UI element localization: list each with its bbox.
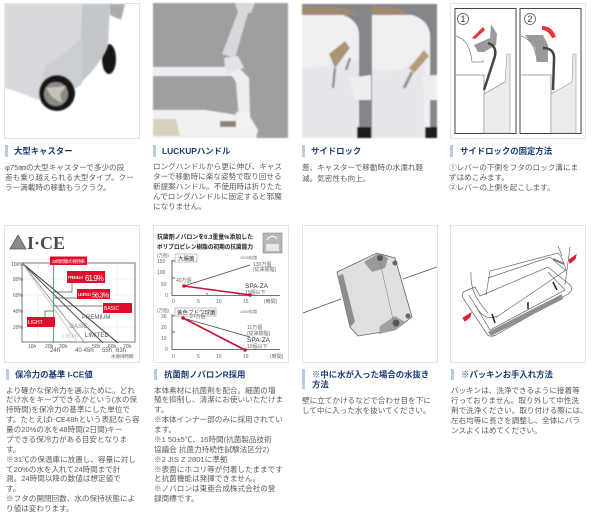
text: I-CE: だけ水をキープできるかという(水の保 <box>6 394 137 404</box>
chart title: 抗菌剤ノバロンを0.3重量%添加した <box>157 233 253 241</box>
text: I-CE: す。 <box>6 484 20 493</box>
chart: antibacterial performance: 50 <box>161 282 167 288</box>
red labels: LIGHT <box>28 320 43 326</box>
logo: I-CE: I·CE <box>27 233 65 253</box>
text: fixing method: ①レバーの下側をフタのロック溝にま <box>449 162 578 172</box>
chart title: ポリプロピレン樹脂の初期の抗菌能力 <box>157 243 253 251</box>
panel: I-CE value <box>4 226 140 513</box>
text: antibacterial: 本体素材に抗菌剤を配合。細菌の増 <box>154 385 276 395</box>
chart: antibacterial performance: 0 <box>165 347 168 353</box>
heading: packing care: ※パッキンお手入れ方法 <box>461 370 553 380</box>
axis and series labels: 60% <box>13 293 24 299</box>
photo: caster wheels <box>4 4 140 138</box>
text: I-CE: て20%の水を入れて24時間まで計 <box>6 464 121 474</box>
axis and series labels: 60h <box>108 344 117 350</box>
axis and series labels: 10h <box>28 344 37 350</box>
axis and series labels: 40% <box>13 309 24 315</box>
chart: antibacterial performance: 30 <box>161 314 167 320</box>
chart: antibacterial performance: 15 <box>243 299 249 305</box>
chart: antibacterial performance: 0 <box>165 293 168 299</box>
text: antibacterial: ※本体インナー部のみに採用されてい <box>154 414 283 424</box>
text: fixing method <box>449 162 578 192</box>
text: I-CE <box>6 385 140 513</box>
text: packing care: ンスよくはめてください。 <box>451 426 542 435</box>
photo: side lock closed and open <box>302 4 437 138</box>
text: I-CE: り値は変わります。 <box>6 503 74 513</box>
text: side lock <box>302 162 423 183</box>
chart: antibacterial performance: 0 <box>172 354 175 360</box>
text: I-CE: 測。24時間以降の数値は想定値で <box>6 473 121 483</box>
chart: antibacterial performance: 100 <box>157 270 166 276</box>
axis and series labels: 20h <box>45 344 54 350</box>
heading: antibacterial: 抗菌剤ノバロンR採用 <box>164 370 245 380</box>
text: fixing method: ずはめこみます。 <box>449 172 509 182</box>
chart: I-CE retention <box>4 226 140 362</box>
text: I-CE: 量の20%の水を48時間(2日間)キー <box>6 424 122 434</box>
red labels: PREMIUM <box>68 275 83 280</box>
axis and series labels: 40·45h <box>75 348 94 354</box>
red labels: 24時間後の保持率 <box>52 258 86 265</box>
chart: antibacterial performance: 20 <box>161 325 167 331</box>
text: antibacterial: と抗菌機能は発揮できません。 <box>154 473 260 483</box>
red labels <box>27 256 132 327</box>
illustration: packing removal <box>450 226 586 362</box>
chart: antibacterial performance: 1000倍増 <box>240 254 257 260</box>
text: draining water: して中に入った水を抜いてください。 <box>302 405 430 415</box>
axis and series labels: 水保持時間 <box>111 353 134 360</box>
panel: LUCKUP handle <box>153 3 288 211</box>
text: packing care: 左右均等に長さを調整し、全体にバラ <box>451 415 580 425</box>
red labels: BASIC <box>104 306 119 312</box>
axis and series labels: 50h <box>92 344 101 350</box>
text: antibacterial: 協議会 抗菌力持続性試験法区分2) <box>154 444 270 454</box>
chart title <box>157 233 253 251</box>
panel: packing care <box>450 226 588 435</box>
text: large caster: ラー満載時の移動もラクラク。 <box>5 182 111 192</box>
text: draining water: 壁に立てかけるなどで合わせ目を下に <box>302 395 431 405</box>
text: antibacterial: 録商標です。 <box>154 493 199 503</box>
chart: antibacterial performance: 1000倍増 <box>240 308 257 314</box>
chart: antibacterial performance: (時間) <box>264 299 278 305</box>
text: antibacterial <box>154 385 283 503</box>
axis and series labels: 100% <box>11 262 24 268</box>
text: fixing method: ②レバーの上側を起こします。 <box>449 182 555 192</box>
photo: handle <box>153 3 288 138</box>
text: large caster: φ75㎜の大型キャスターで多少の段 <box>5 162 125 172</box>
chart: antibacterial performance: SPA-ZA <box>247 337 271 344</box>
chart: antibacterial performance: 0 <box>172 299 175 305</box>
chart: antibacterial performance: 40万個 <box>176 277 192 284</box>
text: LUCKUP handle: ターで移動時に楽な姿勢で取り回せる <box>153 171 282 181</box>
chart: antibacterial performance: 150 <box>157 259 166 265</box>
chart: antibacterial performance: (時間) <box>270 354 284 360</box>
illustration: tilted cooler <box>302 226 438 362</box>
axis and series labels: 80% <box>13 277 24 283</box>
text: LUCKUP handle <box>153 161 282 211</box>
chart: antibacterial performance: 5 <box>197 354 200 360</box>
text: side lock: 減。気密性も向上。 <box>302 173 370 183</box>
text: I-CE: す。 <box>6 445 20 454</box>
axis and series labels: 20% <box>13 325 24 331</box>
chart: antibacterial performance: 10 <box>216 299 222 305</box>
chart: antibacterial performance: 5 <box>197 299 200 305</box>
red labels: LIMITED <box>78 292 92 297</box>
text: antibacterial: ※2 JIS Z 2801に準拠 <box>154 454 228 464</box>
text: antibacterial: ※表面にホコリ等が付着したままです <box>154 464 283 474</box>
axis and series labels: 24h <box>50 348 60 354</box>
heading: side lock: サイドロック <box>311 146 361 156</box>
text: draining water <box>302 395 431 415</box>
heading: draining water <box>302 369 429 390</box>
panel: side lock <box>302 4 437 183</box>
chart: antibacterial performance: 15 <box>243 354 249 360</box>
heading: LUCKUP handle: LUCKUPハンドル <box>162 146 231 156</box>
axis and series labels: PREMIUM <box>82 315 110 321</box>
panel: large caster <box>4 4 140 192</box>
chart: antibacterial performance: 10個以下 <box>245 289 266 296</box>
text: packing care: 行っておりません。取り外して中性洗 <box>451 395 579 405</box>
chart: antibacterial performance: (万個) <box>157 252 169 259</box>
text: antibacterial: す。 <box>154 405 168 414</box>
chart: antibacterial performance: 黄色ブドウ球菌 <box>177 308 216 316</box>
axis and series labels: 70h <box>123 344 132 350</box>
text: side lock: 蓋、キャスターで移動時の水濡れ軽 <box>302 162 423 172</box>
red labels: 56.3% <box>92 292 109 300</box>
text: packing care <box>451 385 588 435</box>
heading: draining water: 方法 <box>312 380 329 390</box>
heading: large caster: 大型キャスター <box>14 146 73 156</box>
text: antibacterial: 殖を抑制し、清潔にお使いいただけま <box>154 394 283 404</box>
text: I-CE: 持時間)を保冷力の基準にした単位で <box>6 404 130 414</box>
chart: antibacterial performance: 10 <box>216 354 222 360</box>
red labels: 61.9% <box>85 274 104 283</box>
chart: antibacterial performance: 11万個 <box>247 324 262 331</box>
chart: antibacterial performance: (従来樹脂) <box>247 330 271 337</box>
chart: antibacterial performance: (従来樹脂) <box>253 266 277 273</box>
heading: fixing method: サイドロックの固定方法 <box>460 146 553 156</box>
chart: antibacterial performance: 130万個 <box>253 261 271 268</box>
text: LUCKUP handle: になりません。 <box>153 202 206 211</box>
panel: side lock fixing method <box>449 4 586 192</box>
text: packing care: 剤で洗浄ください。取り付ける際には、 <box>451 405 588 415</box>
text: I-CE: ※フタの開閉回数、水の保持状態によ <box>6 493 135 503</box>
step 1 diagram: 1 <box>460 14 466 24</box>
text: packing care: パッキンは、洗浄できるように接着等 <box>451 385 580 395</box>
text: LUCKUP handle: ロングハンドルから更に伸び、キャス <box>153 161 282 171</box>
heading: I-CE: 保冷力の基準 I-CE値 <box>15 370 93 380</box>
chart: antibacterial performance: 大腸菌 <box>178 254 195 262</box>
axis and series labels <box>11 262 134 360</box>
text: antibacterial: ます。 <box>154 425 176 434</box>
chart: antibacterial performance: (万個) <box>157 307 169 314</box>
icon: antibacterial badge <box>263 233 282 253</box>
panel: draining water <box>302 226 438 415</box>
axis and series labels: LIMITED <box>85 333 109 339</box>
panel: antibacterial agent <box>154 226 288 503</box>
text: large caster <box>5 162 134 192</box>
text: I-CE: プできる保冷力がある目安となりま <box>6 434 127 444</box>
axis and series labels: 30h <box>59 344 68 350</box>
diagram: fixing steps <box>450 4 586 138</box>
text: I-CE: より確かな保冷力を選ぶために。どれ <box>6 385 135 395</box>
chart: antibacterial performance: SPA-ZA <box>245 283 269 290</box>
axis and series labels: BASIC <box>70 324 89 330</box>
heading: draining water: ※中に水が入った場合の水抜き <box>312 370 429 380</box>
axis and series labels: 63h <box>116 348 126 354</box>
text: LUCKUP handle: 新提案ハンドル。不使用時は折りたた <box>153 181 282 191</box>
chart: antibacterial performance: 10 <box>161 336 167 342</box>
text: large caster: 差も乗り越えられる大型タイプ。クー <box>5 172 134 182</box>
chart: antibacterial performance: 27万個 <box>190 313 206 320</box>
text: LUCKUP handle: んでロングハンドルに固定すると邪魔 <box>153 191 282 201</box>
text: I-CE: す。たとえばI-CE48hという表記なら容 <box>6 414 140 424</box>
text: I-CE: ※31℃の保温庫に放置し、容量に対し <box>6 454 136 464</box>
chart: antibacterial performance <box>154 226 288 362</box>
text: antibacterial: ※ノバロンは東亜合成株式会社の登 <box>154 483 276 493</box>
step 2 diagram: 2 <box>527 14 533 24</box>
chart: antibacterial performance: 10個以下 <box>247 343 268 350</box>
axis and series labels: LIGHT <box>62 334 80 340</box>
text: antibacterial: ※1 50±5℃、16時間(抗菌製品技術 <box>154 434 272 444</box>
axis and series labels: 55h <box>102 348 112 354</box>
